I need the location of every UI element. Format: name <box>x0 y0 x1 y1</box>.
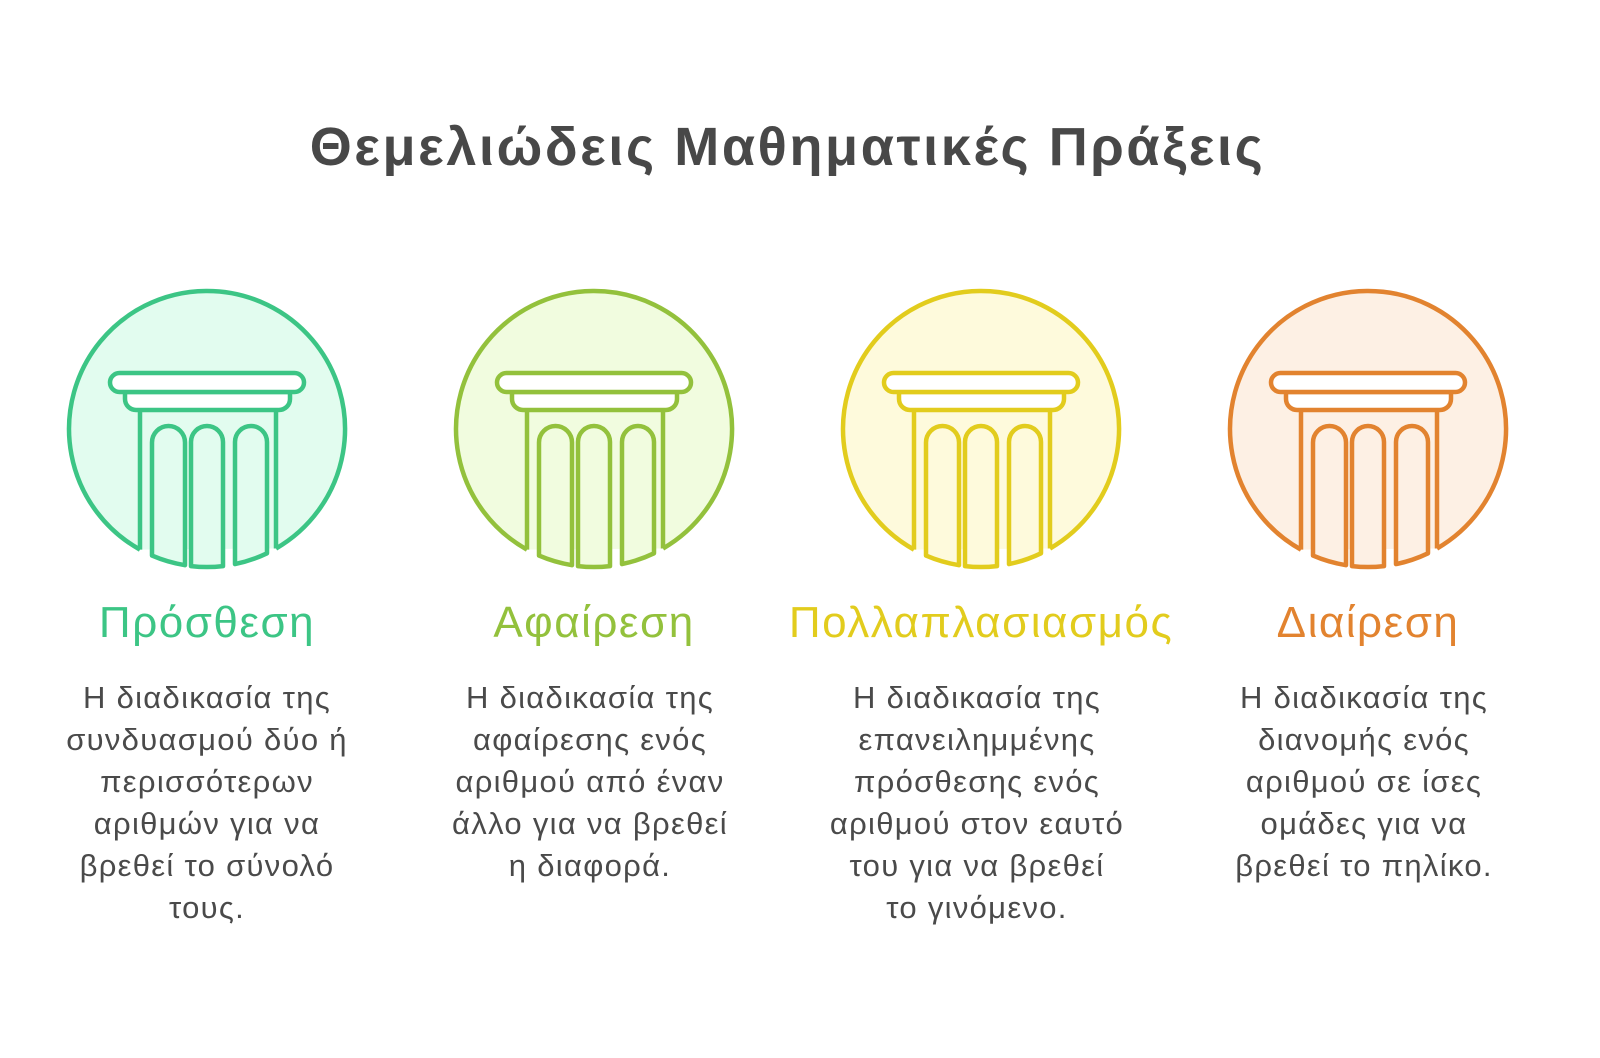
text: division: ομάδες για να <box>1261 806 1467 841</box>
text: addition: Η διαδικασία της <box>83 680 331 715</box>
text: subtraction: αφαίρεσης ενός <box>473 722 707 757</box>
heading: subtraction: Αφαίρεση <box>493 598 695 647</box>
text: addition: τους. <box>169 890 245 925</box>
text: multiplication <box>830 680 1124 925</box>
icon: column lime <box>456 291 732 567</box>
text: division: Η διαδικασία της <box>1240 680 1488 715</box>
text: subtraction: η διαφορά. <box>509 848 671 883</box>
text: addition: αριθμών για να <box>94 806 320 841</box>
text: addition: βρεθεί το σύνολό <box>80 848 334 883</box>
text: addition: περισσότερων <box>100 764 314 799</box>
text: multiplication: του για να βρεθεί <box>850 848 1104 883</box>
icon: column green <box>69 291 345 567</box>
text: multiplication: επανειλημμένης <box>858 722 1096 757</box>
text: addition: συνδυασμού δύο ή <box>66 722 348 757</box>
text: multiplication: το γινόμενο. <box>886 890 1068 925</box>
heading: addition: Πρόσθεση <box>99 598 315 647</box>
text: multiplication: πρόσθεσης ενός <box>854 764 1100 799</box>
icon: column yellow <box>843 291 1119 567</box>
text: subtraction: άλλο για να βρεθεί <box>452 806 728 841</box>
title: Θεμελιώδεις Μαθηματικές Πράξεις <box>310 117 1265 177</box>
text: multiplication: αριθμού στον εαυτό <box>830 806 1124 841</box>
text: multiplication: Η διαδικασία της <box>853 680 1101 715</box>
heading: division: Διαίρεση <box>1277 598 1459 647</box>
text: division: αριθμού σε ίσες <box>1246 764 1482 799</box>
heading: multiplication: Πολλαπλασιασμός <box>789 598 1173 647</box>
icon: column orange <box>1230 291 1506 567</box>
text: division: βρεθεί το πηλίκο. <box>1235 848 1493 883</box>
text: subtraction <box>452 680 728 883</box>
text: subtraction: Η διαδικασία της <box>466 680 714 715</box>
text: division: διανομής ενός <box>1258 722 1470 757</box>
text: subtraction: αριθμού από έναν <box>455 764 725 799</box>
text: division <box>1235 680 1493 883</box>
text: addition <box>66 680 348 925</box>
